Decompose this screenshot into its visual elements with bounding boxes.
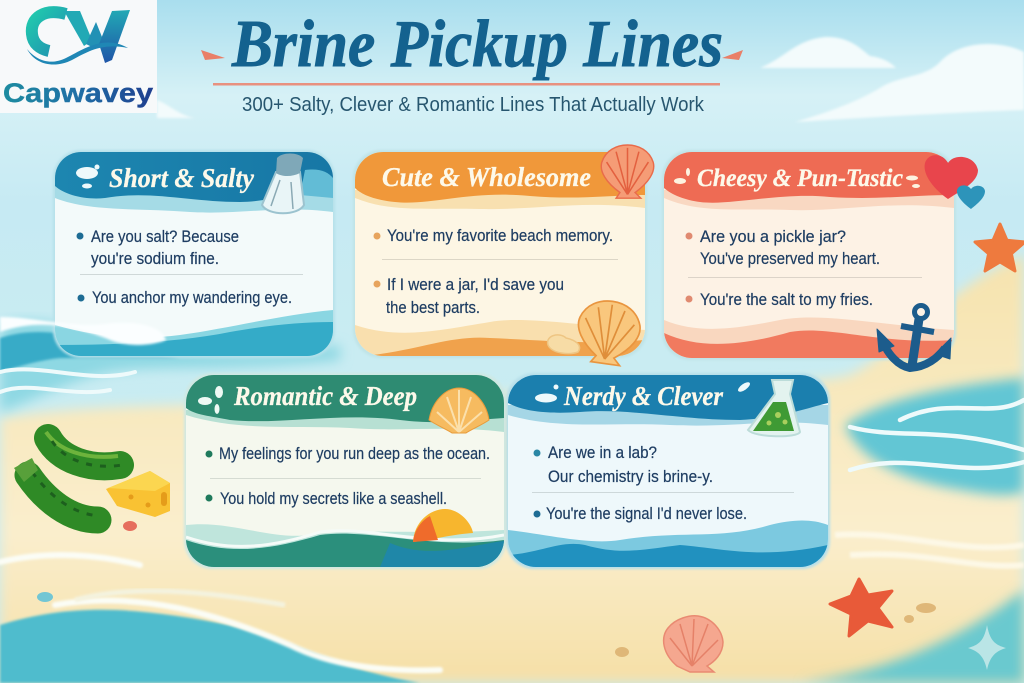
background: bottom left water (0, 555, 440, 683)
panel: Cheesy & Pun-Tastic (662, 150, 985, 368)
icon: blue pebble (37, 592, 53, 602)
icon: hearts (925, 155, 985, 209)
heading: Nerdy & Clever (563, 381, 723, 411)
title underline (213, 83, 720, 86)
text: line 1: Our chemistry is brine-y. (548, 468, 713, 486)
text: line 1 (76, 228, 239, 268)
icon: sand pebbles (615, 603, 936, 657)
icon: header splashes (674, 168, 920, 188)
icon: salt shaker (262, 154, 304, 213)
icon: pickle one (46, 432, 122, 466)
text: line 1: You're my favorite beach memory. (387, 227, 613, 245)
text: line 2: the best parts. (386, 299, 480, 317)
icon: yellow seashell (429, 388, 489, 433)
background: clouds (157, 37, 1024, 122)
icon: water splash (198, 386, 223, 414)
icon: yellow seashell (573, 297, 643, 368)
panel: Romantic & Deep (184, 373, 506, 569)
icon: orange seashell (601, 145, 654, 198)
text: line 1: you're sodium fine. (91, 250, 219, 268)
icon: sand shell small (548, 335, 580, 354)
text: line 2: You hold my secrets like a seashell. (220, 490, 447, 508)
icon: sparkle (968, 625, 1006, 670)
logo wordmark: Capwavey (3, 78, 153, 108)
icon: anchor (877, 306, 951, 368)
text: line 1: You've preserved my heart. (700, 250, 880, 268)
text: line 2: You're the salt to my fries. (700, 291, 873, 309)
text: line 1: My feelings for you run deep as the ocean. (219, 445, 490, 463)
heading: Short & Salty (109, 163, 255, 193)
text: line 2: You're the signal I'd never lose. (546, 505, 747, 523)
text: line 1: Are we in a lab? (548, 444, 657, 462)
logo mark: CW (27, 10, 130, 65)
foam crest over panel one (0, 317, 166, 345)
icon: pickle two (14, 458, 100, 520)
text: line 2 (374, 276, 564, 317)
icon: red pebble (123, 521, 137, 531)
text: line 1: Are you salt? Because (91, 228, 239, 246)
icon: cheese (106, 471, 170, 517)
background: bottom right water (800, 590, 1024, 683)
title accent right (722, 50, 743, 60)
icon: orange starfish (975, 224, 1024, 271)
icon: pink seashell (664, 616, 723, 672)
text: line 2: You anchor my wandering eye. (92, 289, 292, 307)
icon: red starfish (830, 579, 892, 636)
heading: Romantic & Deep (233, 381, 417, 411)
heading: Cheesy & Pun-Tastic (697, 165, 903, 192)
background: sand beach (0, 255, 1024, 683)
text: line 2: If I were a jar, I'd save you (387, 276, 564, 294)
heading: Cute & Wholesome (382, 162, 591, 192)
text: line 1 (534, 444, 713, 486)
icon: beach ball (413, 509, 473, 542)
logo: Capwavey (0, 0, 157, 113)
title: Brine Pickup Lines (231, 7, 723, 81)
subtitle: 300+ Salty, Clever & Romantic Lines That Actually Work (242, 94, 705, 116)
background: right ocean band (835, 378, 1024, 566)
icon: water splash (535, 381, 751, 402)
icon: water splash (76, 164, 100, 188)
title accent left (201, 50, 225, 60)
panel: Cute & Wholesome (353, 145, 654, 368)
text: line 1: Are you a pickle jar? (700, 228, 846, 246)
text: line 1 (686, 228, 880, 268)
icon: flask (748, 380, 800, 436)
background: left ocean waves (0, 321, 340, 412)
panel: Short & Salty (53, 150, 335, 358)
panel: Nerdy & Clever (506, 373, 830, 569)
